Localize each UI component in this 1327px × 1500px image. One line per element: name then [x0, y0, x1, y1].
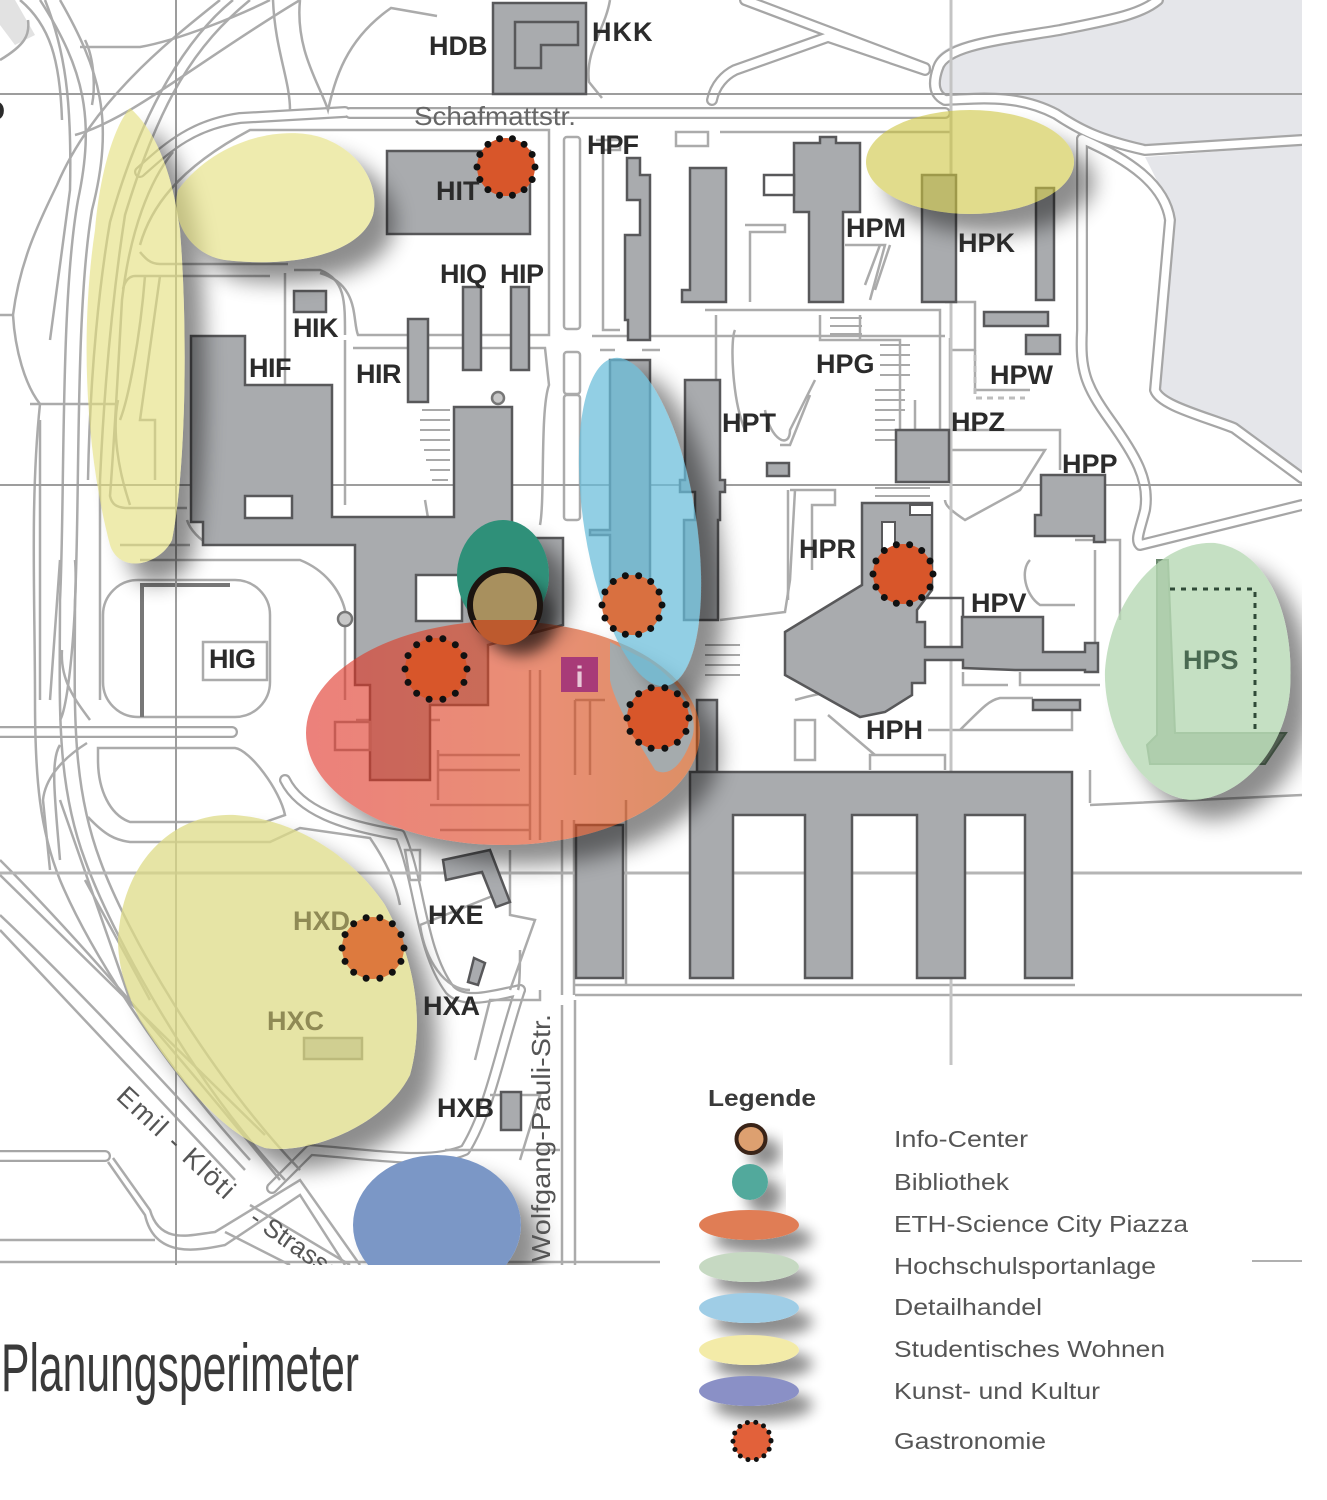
small round pavilions — [338, 392, 504, 626]
building labels: HPG — [816, 349, 875, 379]
zone: Studentisches Wohnen south-west — [118, 815, 417, 1149]
comb building — [690, 772, 1072, 978]
buildings — [191, 3, 1286, 1130]
short map line right of legend — [1252, 1260, 1302, 1262]
info-center marker — [469, 569, 541, 645]
legend title: Legende — [708, 1085, 816, 1111]
building HPF strip — [625, 158, 650, 340]
building labels: HPZ — [951, 407, 1005, 437]
gastronomy HIT — [477, 138, 535, 196]
building labels: HPW — [990, 360, 1054, 390]
dotted perimeter near HPW — [975, 355, 1025, 398]
building labels: HPM — [846, 213, 906, 243]
building labels: HPH — [866, 715, 923, 745]
building labels: HIR — [356, 359, 401, 389]
legend: Bibliothek — [732, 1164, 1010, 1200]
legend: Detailhandel: Detailhandel — [894, 1294, 1042, 1320]
HPV annex — [1033, 700, 1080, 710]
building HIK — [294, 291, 326, 312]
info icon: i — [575, 661, 584, 694]
white legend backdrop — [660, 1067, 1327, 1500]
gastronomy HPR — [873, 544, 933, 604]
building labels: HXE — [428, 900, 484, 930]
building labels: HPS — [1183, 645, 1239, 675]
legend: Kunst und Kultur — [699, 1376, 1100, 1406]
legend: Detailhandel — [699, 1293, 1042, 1323]
building labels: HPP — [1062, 449, 1118, 479]
grey terrain areas — [932, 0, 1302, 478]
legend: Gastronomie — [733, 1422, 1046, 1460]
gastronomy Piazza east — [627, 687, 689, 749]
zone: Detailhandel — [559, 349, 721, 695]
annex box — [335, 722, 370, 750]
main building HI — [191, 336, 563, 780]
buildings HXE HXA HXB HXC — [304, 850, 521, 1130]
legend: ETH-Science City Piazza — [699, 1210, 1188, 1240]
right white margin — [1302, 0, 1327, 1500]
building labels: HIT — [436, 176, 480, 206]
legend: Hochschulsportanlage: Hochschulsportanlage — [894, 1253, 1156, 1279]
legend: Gastronomie: Gastronomie — [894, 1428, 1046, 1454]
grey overlap leaf — [610, 642, 694, 772]
street name: Emil-Klöti: Emil - Klöti — [111, 1080, 241, 1205]
legend: Bibliothek: Bibliothek — [894, 1169, 1010, 1195]
building labels: HIK — [293, 313, 339, 343]
building labels: HIQ — [440, 259, 487, 289]
building labels: HPR — [799, 534, 856, 564]
courtyards of main building — [245, 496, 462, 621]
road network — [0, 0, 1302, 1188]
street name: Wolfgang-Pauli-Str: Wolfgang-Pauli-Str. — [526, 1014, 556, 1262]
building labels: HIP — [500, 259, 544, 289]
zone: Studentisches Wohnen north blob — [176, 133, 374, 262]
street name: Strasse: - Strasse — [245, 1202, 347, 1287]
building labels: HXC — [267, 1006, 324, 1036]
building labels: HPK — [958, 228, 1016, 258]
buildings HIR HIQ HIP — [408, 287, 529, 402]
building labels: HXD — [293, 906, 350, 936]
HPR courtyards — [882, 505, 932, 550]
building HPZ — [896, 430, 949, 482]
building labels: HKK — [592, 17, 654, 47]
building HIT — [387, 151, 530, 234]
building HPT — [680, 380, 725, 620]
legend: Studentisches Wohnen: Studentisches Wohnen — [894, 1336, 1165, 1362]
gastronomy Detailhandel — [602, 575, 662, 635]
building labels: HXB — [437, 1093, 494, 1123]
HPV wall — [922, 598, 963, 617]
info icon — [561, 657, 598, 694]
building HPH HPR — [785, 503, 1098, 717]
legend: Info-Center — [735, 1124, 1028, 1154]
zone: Studentisches Wohnen north-east — [866, 110, 1074, 214]
building HPS — [1147, 560, 1286, 764]
gastronomy Piazza west — [405, 638, 467, 700]
zone: Bibliothek — [457, 520, 549, 630]
legend — [699, 1085, 1188, 1460]
gastronomy HXD — [342, 917, 404, 979]
top buildings HPM HPK — [682, 168, 726, 302]
legend: Studentisches Wohnen — [699, 1335, 1165, 1365]
building labels — [209, 17, 1239, 1123]
building labels: HIF — [249, 353, 291, 383]
dark HIG court lines — [142, 585, 230, 717]
building labels: HPT — [722, 408, 777, 438]
block beside blue zone — [590, 360, 650, 620]
zone: Hochschulsportanlage — [1105, 543, 1291, 800]
zone: ETH-Science City Piazza — [306, 621, 700, 845]
zone: Kunst und Kultur — [353, 1155, 521, 1295]
legend: Hochschulsportanlage — [699, 1252, 1156, 1282]
building labels: HIG — [209, 644, 256, 674]
gastronomy markers — [342, 138, 933, 979]
legend: Info-Center: Info-Center — [894, 1126, 1028, 1152]
building HDB HKK — [493, 3, 586, 94]
HPS dotted field — [1170, 589, 1255, 733]
building HPP — [1035, 475, 1105, 542]
legend: ETH-Science City Piazza: ETH-Science City Piazza — [894, 1211, 1188, 1237]
legend: Kunst und Kultur: Kunst- und Kultur — [894, 1378, 1100, 1404]
comb west wing — [576, 825, 623, 978]
street name: Schafmattstr: Schafmattstr. — [414, 101, 576, 131]
building labels: HXA — [423, 991, 480, 1021]
building labels: HPV — [971, 588, 1027, 618]
hatched stairs — [420, 318, 930, 675]
title: Planungsperimeter — [1, 1330, 359, 1406]
building labels: HPF — [587, 130, 639, 160]
corner building — [697, 700, 717, 772]
building labels: HDB — [429, 31, 488, 61]
zone: Studentisches Wohnen west strip — [87, 108, 185, 564]
small HPT annex — [767, 463, 789, 476]
